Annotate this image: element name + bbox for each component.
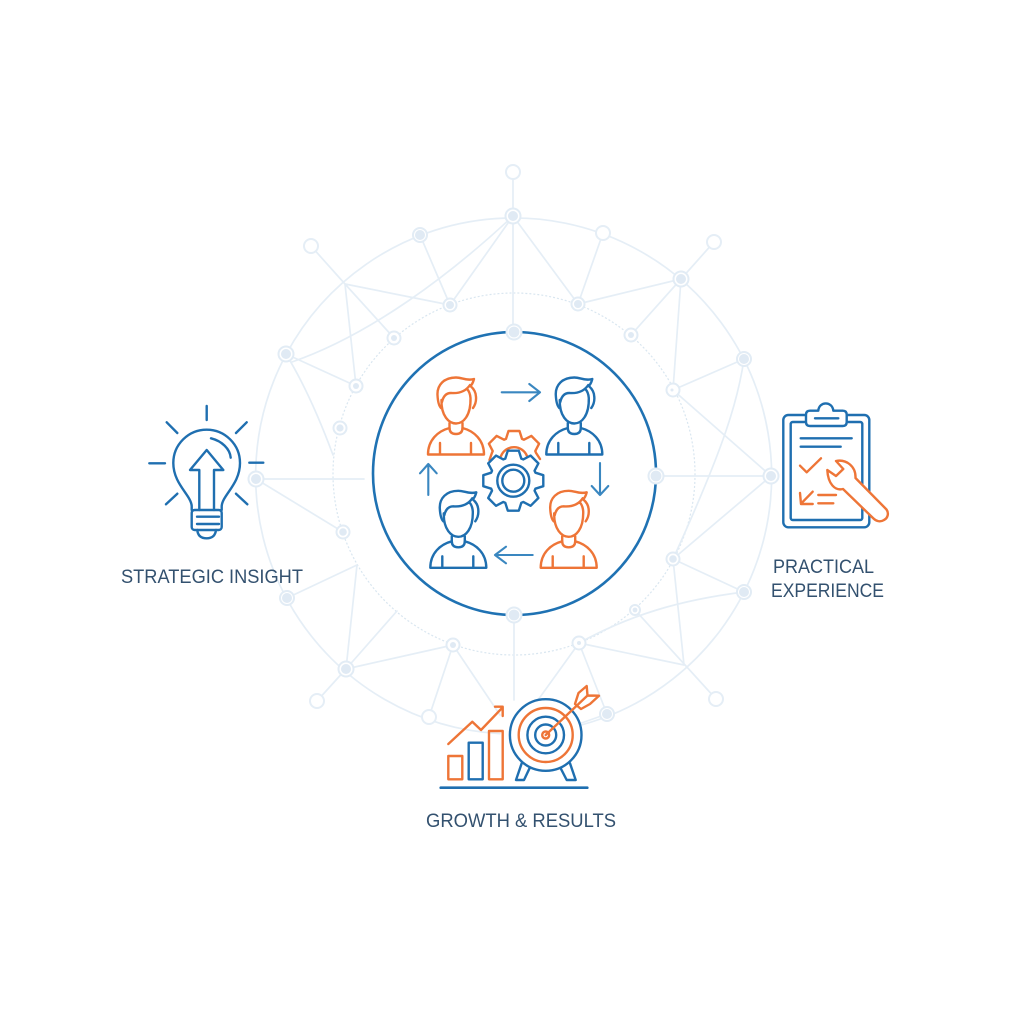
baseline: [441, 786, 587, 789]
person: bottom right: [541, 491, 597, 568]
person: top left: [428, 378, 484, 454]
dart: [546, 686, 599, 735]
label: strategic insight: STRATEGIC INSIGHT: [121, 567, 303, 588]
arrow: left: [495, 547, 533, 563]
person: bottom left: [430, 491, 486, 568]
icon: orange gear: [489, 431, 540, 460]
bar chart: [448, 731, 503, 779]
ring nodes: [506, 324, 664, 622]
target: [510, 699, 582, 780]
clipboard: [783, 403, 869, 527]
checklist marks: [800, 458, 836, 504]
icon: blue gear: [483, 451, 543, 511]
icon: growth chart and target: [441, 686, 599, 788]
network nodes: [248, 165, 778, 724]
label: growth and results: GROWTH & RESULTS: [426, 811, 616, 832]
arrow: up: [420, 464, 437, 495]
label: experience: EXPERIENCE: [771, 581, 884, 602]
central circle: [373, 324, 664, 622]
icon: light bulb: [149, 406, 263, 538]
wrench: [827, 461, 888, 521]
trend arrow: [448, 707, 503, 744]
arrow: down: [592, 463, 608, 495]
network background: [248, 165, 778, 734]
person: top right: [546, 378, 602, 454]
icon: clipboard with wrench: [783, 403, 888, 527]
arrow: right: [502, 384, 540, 401]
label: practical: PRACTICAL: [773, 557, 874, 578]
